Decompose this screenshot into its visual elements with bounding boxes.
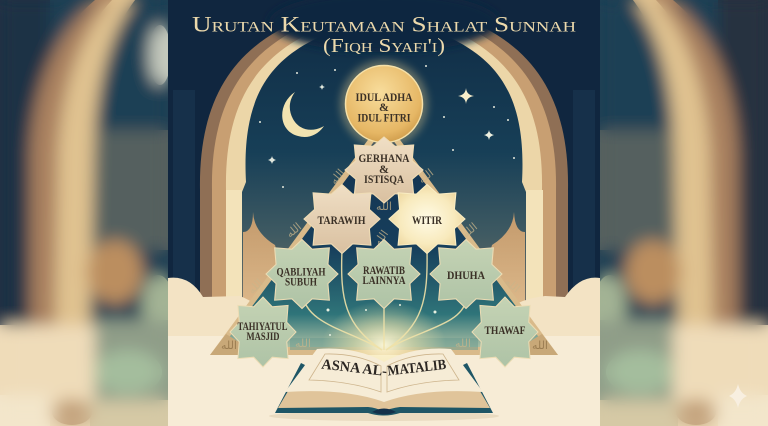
calligraphy ornaments: الله	[459, 220, 480, 240]
tier: Qabliyah Subuh: QABLIYAH	[276, 264, 326, 278]
tier: Dhuha	[430, 240, 502, 308]
tier: Qabliyah Subuh: SUBUH	[285, 274, 318, 288]
arch frame	[173, 0, 595, 300]
tier: Qabliyah Subuh	[266, 240, 338, 308]
tier: Tahiyatul Masjid	[230, 297, 296, 367]
calligraphy ornaments: الله	[376, 200, 392, 213]
tier: Tahiyatul Masjid: MASJID	[246, 329, 280, 343]
background domes	[243, 212, 525, 302]
tier: Gerhana and Istisqa: ISTISQA	[364, 172, 404, 186]
calligraphy ornaments: الله	[416, 166, 436, 186]
tier: Gerhana and Istisqa: GERHANA	[358, 151, 410, 165]
tier: Thawaf	[472, 297, 538, 367]
title: Urutan Keutamaan Shalat Sunnah	[192, 12, 576, 36]
calligraphy ornaments: الله	[455, 337, 471, 350]
panel: blurred left background	[0, 0, 174, 426]
tier: Tahiyatul Masjid: TAHIYATUL	[238, 319, 288, 333]
title: (Fiqh Syafi'i)	[323, 35, 445, 57]
calligraphy ornaments: الله	[295, 337, 311, 350]
tier: Gerhana and Istisqa: &	[379, 162, 389, 176]
calligraphy ornaments: الله	[502, 275, 523, 295]
tier: Idul Adha and Idul Fitri medallion: &	[379, 100, 389, 114]
tier: Idul Adha and Idul Fitri medallion: IDUL FITRI	[358, 110, 411, 124]
tier: Rawatib Lainnya	[348, 240, 420, 308]
calligraphy ornaments: الله	[327, 166, 347, 187]
tier: Gerhana and Istisqa	[345, 137, 423, 203]
calligraphy ornaments: الله	[371, 228, 391, 248]
panel: central poster	[168, 0, 600, 426]
tier: Tarawih: TARAWIH	[318, 213, 366, 227]
calligraphy ornaments: الله	[245, 276, 266, 297]
connector lines	[302, 250, 466, 350]
icon: crescent moon	[282, 92, 324, 137]
calligraphy ornaments	[221, 166, 548, 352]
tier: Rawatib Lainnya: LAINNYA	[362, 273, 406, 287]
calligraphy ornaments: الله	[283, 220, 304, 240]
title	[192, 17, 576, 56]
pyramid	[210, 118, 558, 355]
clouds and ground	[168, 278, 600, 426]
tier: Thawaf: THAWAF	[484, 323, 526, 337]
calligraphy ornaments: الله	[221, 339, 237, 352]
icon: corner sparkle	[729, 384, 747, 408]
open book: Asna al-Matalib: ASNA AL-	[321, 357, 388, 380]
tier: Witir	[389, 184, 465, 254]
title backdrop fade	[269, 0, 499, 52]
tier: Dhuha: DHUHA	[447, 268, 485, 282]
open book: Asna al-Matalib	[269, 349, 499, 421]
panel: blurred right background	[594, 0, 768, 426]
glow from book	[326, 303, 442, 362]
open book: Asna al-Matalib: MATALIB	[387, 357, 447, 379]
tier: Tarawih	[304, 184, 380, 254]
tier: Idul Adha and Idul Fitri medallion	[340, 60, 428, 148]
sky with stars	[242, 40, 526, 300]
tier: Idul Adha and Idul Fitri medallion: IDUL ADHA	[356, 90, 413, 104]
tier: Witir: WITIR	[412, 213, 442, 227]
calligraphy ornaments: الله	[532, 339, 548, 352]
tier: Rawatib Lainnya: RAWATIB	[363, 263, 405, 277]
